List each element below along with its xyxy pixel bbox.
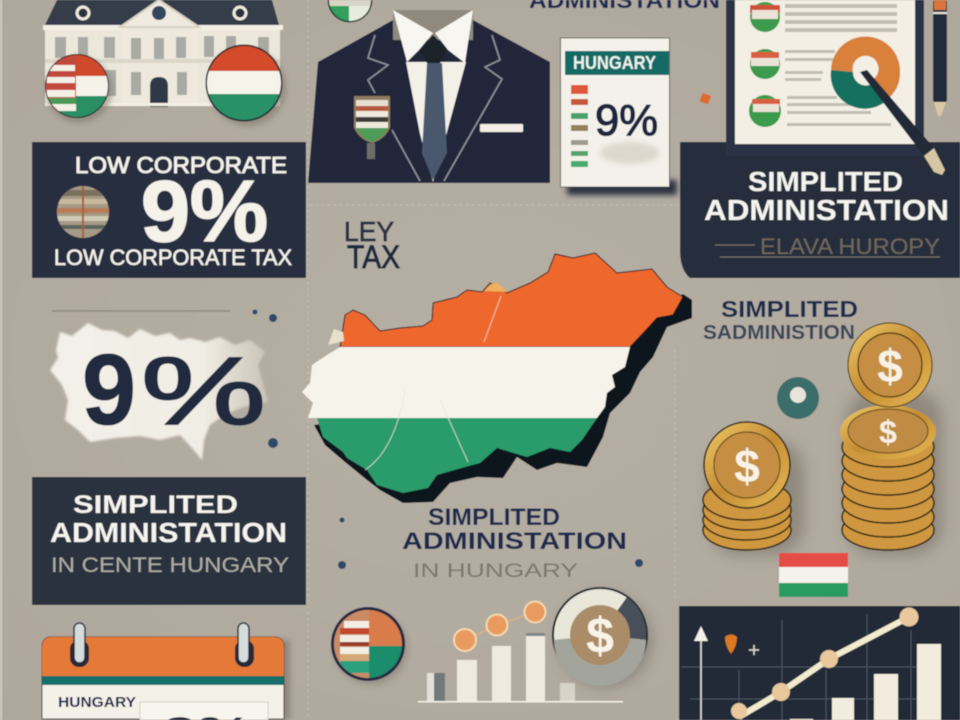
top coin: $ — [877, 340, 903, 392]
icon: lapel pin — [354, 96, 390, 159]
icon: teal dot — [777, 377, 819, 419]
growth line — [739, 617, 909, 717]
icon: flag badge right — [205, 44, 286, 126]
stat: 9: 9 — [82, 334, 136, 446]
card stat: 9% — [595, 96, 658, 145]
heading: administration: ADMINISTATION — [50, 517, 287, 548]
coin stack right — [840, 323, 942, 555]
heading: simplified administration center: IN HUNGARY — [413, 561, 578, 582]
icon: striped globe — [56, 186, 112, 238]
line markers — [731, 608, 918, 719]
label: key tax — [345, 221, 400, 269]
heading: simplified administration center: SIMPLITED — [428, 504, 560, 531]
icon: standing pen — [933, 0, 947, 116]
plus mark — [749, 645, 759, 655]
icon: suit with tie — [308, 10, 550, 183]
coin stack left: $ — [734, 440, 760, 492]
coin stack left — [703, 422, 804, 555]
heading: administration: ADMINISTATION — [704, 195, 949, 227]
heading: simplited: SIMPLITED — [73, 491, 238, 519]
panel: growth chart — [679, 606, 960, 720]
faded smudge — [600, 142, 660, 164]
calendar — [42, 623, 290, 720]
label: key tax: TAX — [347, 239, 400, 275]
icon: flag badge left — [45, 54, 112, 123]
scattered dots — [252, 310, 643, 569]
map shadow — [314, 294, 692, 503]
growth markers — [454, 602, 546, 651]
donut chart — [831, 36, 900, 109]
panel: simplified administration left — [32, 477, 306, 605]
icon: flag circle bottom — [331, 607, 408, 685]
heading: simplified administration right: SADMINISTION — [703, 322, 855, 344]
coin stack right: $ — [879, 414, 897, 450]
caption: low corporate tax: LOW CORPORATE TAX — [54, 245, 292, 270]
icon: Hungarian flag — [779, 553, 848, 597]
calendar rings — [70, 623, 254, 667]
small orange marker — [700, 93, 711, 104]
axis arrow — [694, 626, 708, 720]
heading: simplified administration center — [402, 504, 627, 582]
subtitle: in central Hungary: IN CENTE HUNGARY — [51, 554, 289, 577]
chart bars — [790, 644, 941, 720]
heading: low corporate: LOW CORPORATE — [75, 152, 287, 178]
stat: percent sign: % — [141, 338, 266, 445]
map of Hungary — [302, 253, 692, 503]
icon: dollar dial: $ — [586, 608, 614, 664]
orange marker — [725, 634, 737, 654]
card legend bars — [571, 85, 588, 167]
icon: pen on document — [860, 70, 945, 175]
document text lines — [785, 4, 897, 126]
panel: low corporate tax — [32, 142, 306, 278]
document flag markers — [749, 2, 781, 127]
document with chart — [726, 0, 924, 156]
bar chart — [418, 602, 623, 702]
card title: HUNGARY — [573, 53, 656, 73]
top coin — [848, 323, 932, 407]
heading: simplited: SIMPLITED — [748, 166, 903, 197]
panel: simplified administration right — [680, 0, 960, 278]
building illustration — [43, 0, 283, 107]
heading: simplified administration right — [703, 296, 858, 344]
card: Hungary 9% — [560, 38, 677, 195]
icon: dollar dial — [553, 588, 651, 686]
heading: simplified administration center: ADMINISTATION — [402, 528, 627, 555]
icon: small flag badge top — [328, 0, 372, 22]
label: key tax: LEY — [344, 216, 394, 247]
pocket square — [480, 124, 523, 132]
faded subtitle: ELAVA HUROPY — [760, 234, 940, 259]
stat: 9%: 9% — [141, 164, 268, 260]
heading: simplified administration right: SIMPLITED — [721, 296, 858, 322]
calendar label: HUNGARY — [58, 694, 136, 711]
torn paper with 9% — [50, 311, 268, 460]
